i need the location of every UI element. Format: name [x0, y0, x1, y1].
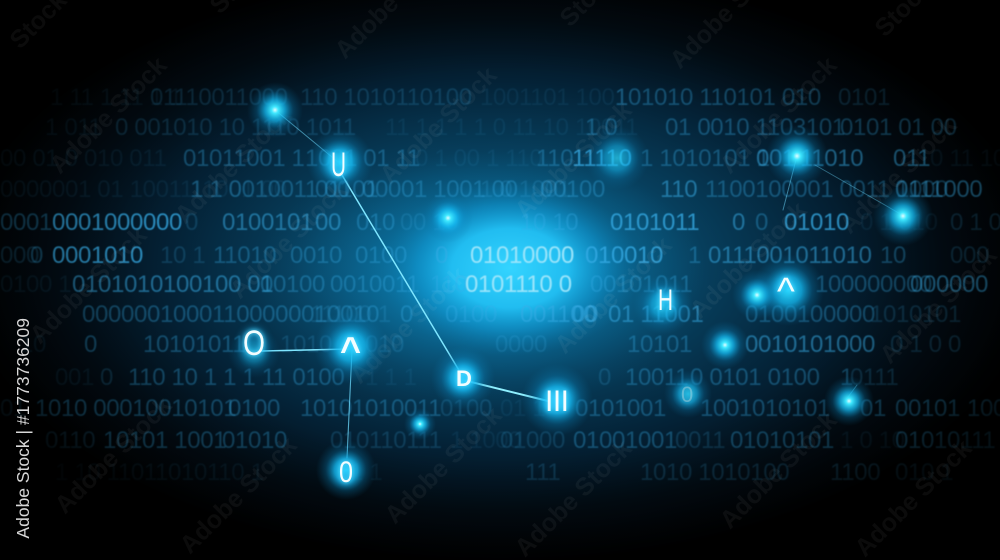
binary row 3: 1001 01 11	[305, 145, 420, 172]
binary row 11: 01 1	[500, 395, 545, 422]
binary row 8: 11100 1	[310, 301, 391, 328]
binary row 5: 01010	[784, 209, 849, 236]
watermarks: Adobe Stock	[684, 196, 812, 324]
binary row 11: 0100	[228, 395, 280, 422]
binary row 8: 0100100000	[745, 301, 875, 328]
binary row 12: 01001001	[573, 427, 677, 454]
binary row 1: 0101	[838, 84, 890, 111]
watermarks: Adobe Stock	[169, 101, 297, 229]
binary row 12	[45, 427, 995, 454]
binary row 6: 0	[30, 242, 43, 269]
binary row 4: 1 0 1001	[480, 176, 571, 203]
binary row 12: 1 0 10	[840, 427, 905, 454]
binary row 11: 01	[860, 395, 886, 422]
binary row 5: 0	[732, 209, 745, 236]
binary row 8: 0100	[445, 301, 497, 328]
watermarks: Adobe Stock	[379, 401, 507, 529]
binary row 1	[50, 84, 890, 111]
watermarks: Adobe Stock	[344, 261, 472, 389]
binary row 8: 01 11001	[608, 301, 704, 328]
connecting lines	[262, 110, 904, 458]
binary row 9: 0 1 0 0	[890, 331, 961, 358]
binary row 11: 0101001	[575, 395, 666, 422]
binary row 9: 10	[20, 331, 46, 358]
binary row 6: 0	[435, 242, 448, 269]
binary row 11: 1001010101	[700, 395, 830, 422]
binary row 12: 0011	[675, 427, 725, 454]
watermarks: Adobe Stock	[224, 176, 352, 304]
glowing letters: 0	[681, 382, 693, 407]
binary row 4: 01101	[315, 176, 378, 203]
binary row 11: 10101010011	[300, 395, 441, 422]
binary row 12: 0110	[45, 427, 95, 454]
binary row 6: 1	[688, 242, 701, 269]
watermarks: Adobe Stock	[509, 434, 637, 560]
binary row 7: 00101011	[590, 271, 692, 298]
binary row 2: 1 0	[585, 114, 617, 141]
binary row 9: 10101	[627, 331, 692, 358]
binary row 8: 001100	[520, 301, 596, 328]
binary row 3	[0, 145, 1000, 172]
glowing letters: 0	[339, 456, 353, 489]
binary row 9: 10101011	[143, 331, 245, 358]
binary row 3: 11110	[572, 145, 632, 172]
watermarks: Adobe Stock	[49, 391, 177, 519]
binary row 3: 0 1 00 1 110	[415, 145, 542, 172]
binary row 12: 10101 1001	[103, 427, 226, 454]
binary row 9: 0	[84, 331, 97, 358]
binary row 11	[0, 395, 1000, 422]
binary row 6: 10 1	[160, 242, 205, 269]
glowing letters: ^	[777, 271, 795, 313]
binary row 12: 01000	[500, 427, 565, 454]
binary row 6: 0001010	[52, 242, 143, 269]
binary row 9: 010	[365, 331, 404, 358]
binary row 3: 11010	[800, 145, 863, 172]
binary row 13	[55, 459, 953, 486]
binary row 10: 0111	[850, 364, 898, 391]
watermarks: Adobe Stock	[834, 111, 962, 239]
watermarks: Adobe Stock	[714, 406, 842, 534]
binary row 10: 1 1 1	[365, 364, 417, 391]
glowing letters: H	[658, 284, 673, 317]
binary row 13: 1100	[830, 459, 880, 486]
binary row 9	[20, 331, 961, 358]
binary row 10: 0	[100, 364, 113, 391]
binary row 5: 010	[356, 209, 395, 236]
binary row 8	[82, 301, 961, 328]
binary row 5: 0	[185, 209, 198, 236]
binary row 10	[55, 364, 898, 391]
binary row 5: 00 10	[400, 209, 458, 236]
watermarks: Adobe Stock	[44, 51, 172, 179]
binary row 5: 0001	[0, 209, 52, 236]
binary row 5: 10 10	[520, 209, 578, 236]
binary row 6: 0111001011010	[708, 242, 872, 269]
glowing letters: III	[545, 385, 569, 418]
binary row 7: 110	[430, 271, 467, 298]
binary row 7: 0101110 0	[465, 271, 572, 298]
binary row 1: 101010 110101 010	[615, 84, 821, 111]
binary row 10: 0	[598, 364, 611, 391]
binary row 4: 1 1 0010011 00	[190, 176, 350, 203]
binary row 7: 0101010100100 01	[72, 271, 273, 298]
binary row 7: 100000000	[815, 271, 932, 298]
wide light haze	[250, 150, 710, 410]
central light burst	[380, 180, 640, 356]
binary row 9: 0000	[495, 331, 547, 358]
binary row 5: 00	[315, 209, 341, 236]
binary row 12: 01010	[222, 427, 287, 454]
binary row 11: 1010 00010010101	[35, 395, 236, 422]
binary row 7: 0100 1	[0, 271, 71, 298]
binary row 6: 01010000	[470, 242, 574, 269]
binary row 11: 0100	[440, 395, 492, 422]
binary row 3: 01011001 1	[183, 145, 305, 172]
binary row 3: 001	[756, 145, 795, 172]
binary row 11: 00101	[895, 395, 960, 422]
glowing letters: U	[331, 146, 346, 184]
binary row 13: 1010 1010100	[640, 459, 789, 486]
binary row 6: 000	[0, 242, 39, 269]
binary row 5: 0	[755, 209, 768, 236]
binary row 8: 00	[572, 301, 598, 328]
binary row 5: 0 1 010	[860, 209, 938, 236]
binary row 8: 0	[400, 301, 413, 328]
binary row 5: 0100101	[222, 209, 313, 236]
binary row 10: 001	[55, 364, 94, 391]
glowing letters	[243, 146, 795, 489]
binary row 4	[0, 176, 982, 203]
binary row 3: 00 01 0 010 011	[0, 145, 166, 172]
binary row 6: 10	[880, 242, 906, 269]
binary row 2: 01 0010 1103101	[665, 114, 845, 141]
binary row 4: 0000001 01 1001111001 00	[0, 176, 287, 203]
binary row 8: 1010101	[870, 301, 961, 328]
binary row 12: 010110111	[330, 427, 442, 454]
glowing nodes	[228, 82, 933, 500]
binary row 4: 110	[660, 176, 697, 203]
binary row 4: 1100100001 0011 1000	[705, 176, 948, 203]
watermarks: Adobe Stock	[874, 241, 1000, 369]
binary row 9: 0010101000	[745, 331, 875, 358]
binary row 3: 011	[893, 145, 930, 172]
binary row 7: 000000	[910, 271, 988, 298]
binary row 7	[0, 271, 988, 298]
binary row 6: 010010	[585, 242, 663, 269]
glowing letters: O	[243, 324, 265, 363]
binary row 2: 1 011	[45, 114, 102, 141]
binary row 5: 0001000000	[52, 209, 182, 236]
binary row 8: 00000010001100000010010	[82, 301, 379, 328]
binary row 4: 00100	[540, 176, 605, 203]
watermarks: Adobe Stock	[509, 96, 637, 224]
binary row 2	[45, 114, 957, 141]
binary row 6: 000	[950, 242, 989, 269]
binary row 10: 1	[840, 364, 853, 391]
binary row 13: 1 10 11011010110 1	[55, 459, 264, 486]
watermarks: Adobe Stock	[24, 221, 152, 349]
binary row 5: 0101011	[610, 209, 699, 236]
binary row 2: 0101 01 00	[840, 114, 957, 141]
binary row 4: 00001 1001 00	[362, 176, 518, 203]
binary row 3: 110	[536, 145, 573, 172]
binary row 7: 0010011	[330, 271, 419, 298]
binary row 6	[0, 242, 989, 269]
binary row 12: 01010111	[895, 427, 995, 454]
watermarks: Adobe Stock	[174, 431, 302, 559]
binary row 9: 1010	[280, 331, 332, 358]
binary digit field	[0, 84, 1000, 486]
binary row 5	[0, 209, 1000, 236]
binary row 12: 1 1000	[450, 427, 521, 454]
watermarks: Adobe Stock	[714, 51, 842, 179]
binary row 10: 110 10 1 1 1 11 0100	[128, 364, 344, 391]
watermarks: Adobe Stock	[549, 231, 677, 359]
watermarks: Adobe Stock	[374, 61, 502, 189]
glowing letters: D	[456, 366, 472, 391]
binary row 2: 11 1 1 1 1 0 11 10 10011	[385, 114, 638, 141]
binary row 4: 0111000	[895, 176, 982, 203]
binary row 10: 0 0101 0100	[690, 364, 820, 391]
glowing letters: ^	[340, 329, 361, 370]
binary row 1: 1001101 1001	[480, 84, 628, 111]
vertical stock id: Adobe Stock | #1773736209	[13, 318, 33, 539]
binary row 11: 01	[0, 395, 26, 422]
binary row 13: 010 1	[895, 459, 953, 486]
binary row 1: 1 11 1 11 1 1	[50, 84, 182, 111]
binary row 6: 0100	[355, 242, 407, 269]
binary row 12: 01010101	[730, 427, 834, 454]
binary row 13: 111	[525, 459, 560, 486]
binary row 6: 0010	[290, 242, 342, 269]
binary row 6: 11010	[213, 242, 276, 269]
binary row 3: 1 1010101 1	[640, 145, 770, 172]
binary row 2: 0 001010 10 1110 1011	[115, 114, 356, 141]
binary row 1: 110 1010110100	[300, 84, 472, 111]
binary row 1: 01110011000	[150, 84, 288, 111]
binary row 10: 10011	[625, 364, 688, 391]
watermarks: Adobe Stock	[849, 434, 977, 560]
binary row 7: 00100	[260, 271, 325, 298]
binary row 13: 1 1	[350, 459, 382, 486]
